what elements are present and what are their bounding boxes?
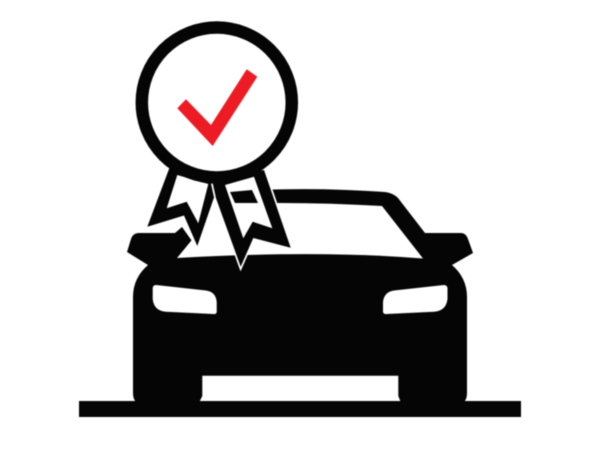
car: [127, 189, 473, 402]
roof visible through ribbon: [230, 190, 258, 203]
ground bar: [79, 401, 521, 417]
badge circle: [142, 28, 292, 178]
right ribbon halo: [212, 170, 291, 267]
right ribbon: [212, 170, 291, 267]
car body and roof: [127, 189, 473, 402]
right headlight: [383, 285, 448, 314]
left headlight: [153, 285, 217, 314]
windshield: [177, 194, 423, 258]
left ribbon tail: [147, 168, 220, 246]
left ribbon inner: [167, 175, 208, 223]
red check mark: [177, 69, 257, 146]
gap under bumper: [200, 376, 400, 401]
right ribbon tail: [212, 170, 291, 267]
left ribbon halo: [147, 168, 220, 246]
left ribbon: [147, 168, 220, 246]
right ribbon inner: [225, 177, 272, 238]
